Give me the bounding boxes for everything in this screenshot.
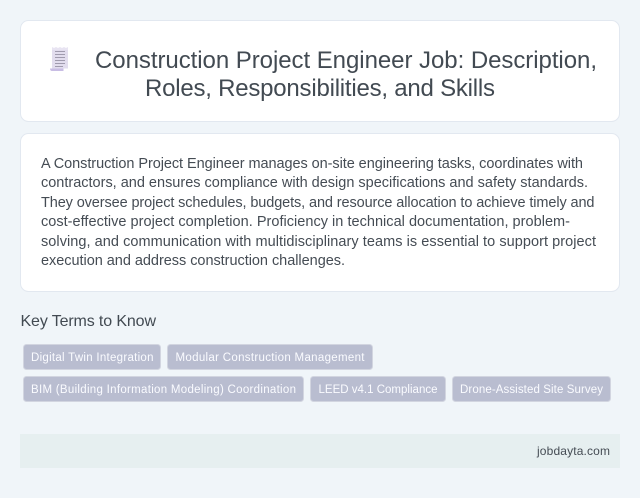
text block: job description: They oversee project schedules, budgets, and resource allocation to achieve timely and bbox=[41, 195, 594, 211]
text block: job description: cost-effective project completion. Proficiency in technical documentation, problem- bbox=[41, 214, 570, 230]
text block: job description: contractors, and ensures compliance with design specifications and safety standards. bbox=[41, 175, 588, 191]
tag: Digital Twin Integration bbox=[24, 344, 160, 370]
tag: Modular Construction Management: Modular Construction Management bbox=[176, 352, 365, 364]
title: Roles, Responsibilities, and Skills bbox=[145, 75, 495, 102]
title bbox=[95, 47, 597, 102]
tag: Drone-Assisted Site Survey: Drone-Assisted Site Survey bbox=[460, 384, 603, 396]
icon: document scroll bbox=[50, 47, 68, 71]
panel: description card bbox=[20, 134, 620, 292]
tag: LEED v4.1 Compliance bbox=[310, 376, 446, 402]
footer bar: jobdayta.com bbox=[536, 444, 610, 458]
text block: job description: solving, and communication with multidisciplinary teams is essential to support project bbox=[41, 234, 596, 250]
title: Construction Project Engineer Job: Description, bbox=[95, 47, 597, 74]
tag: BIM Coordination bbox=[24, 376, 304, 402]
text block: job description: execution and address construction challenges. bbox=[41, 253, 345, 269]
tag: Drone-Assisted Site Survey bbox=[452, 376, 610, 402]
heading: key terms: Key Terms to Know bbox=[20, 313, 156, 330]
tag: Modular Construction Management bbox=[168, 344, 372, 370]
text block: job description bbox=[41, 156, 596, 269]
text block: job description: A Construction Project Engineer manages on-site engineering tasks, coordinates with bbox=[41, 156, 583, 172]
panel: title card bbox=[20, 20, 620, 122]
tag: Digital Twin Integration: Digital Twin Integration bbox=[31, 352, 154, 364]
footer bar bbox=[20, 434, 620, 468]
tag: LEED v4.1 Compliance: LEED v4.1 Compliance bbox=[318, 384, 438, 396]
tag: BIM Coordination: BIM (Building Information Modeling) Coordination bbox=[31, 384, 296, 396]
